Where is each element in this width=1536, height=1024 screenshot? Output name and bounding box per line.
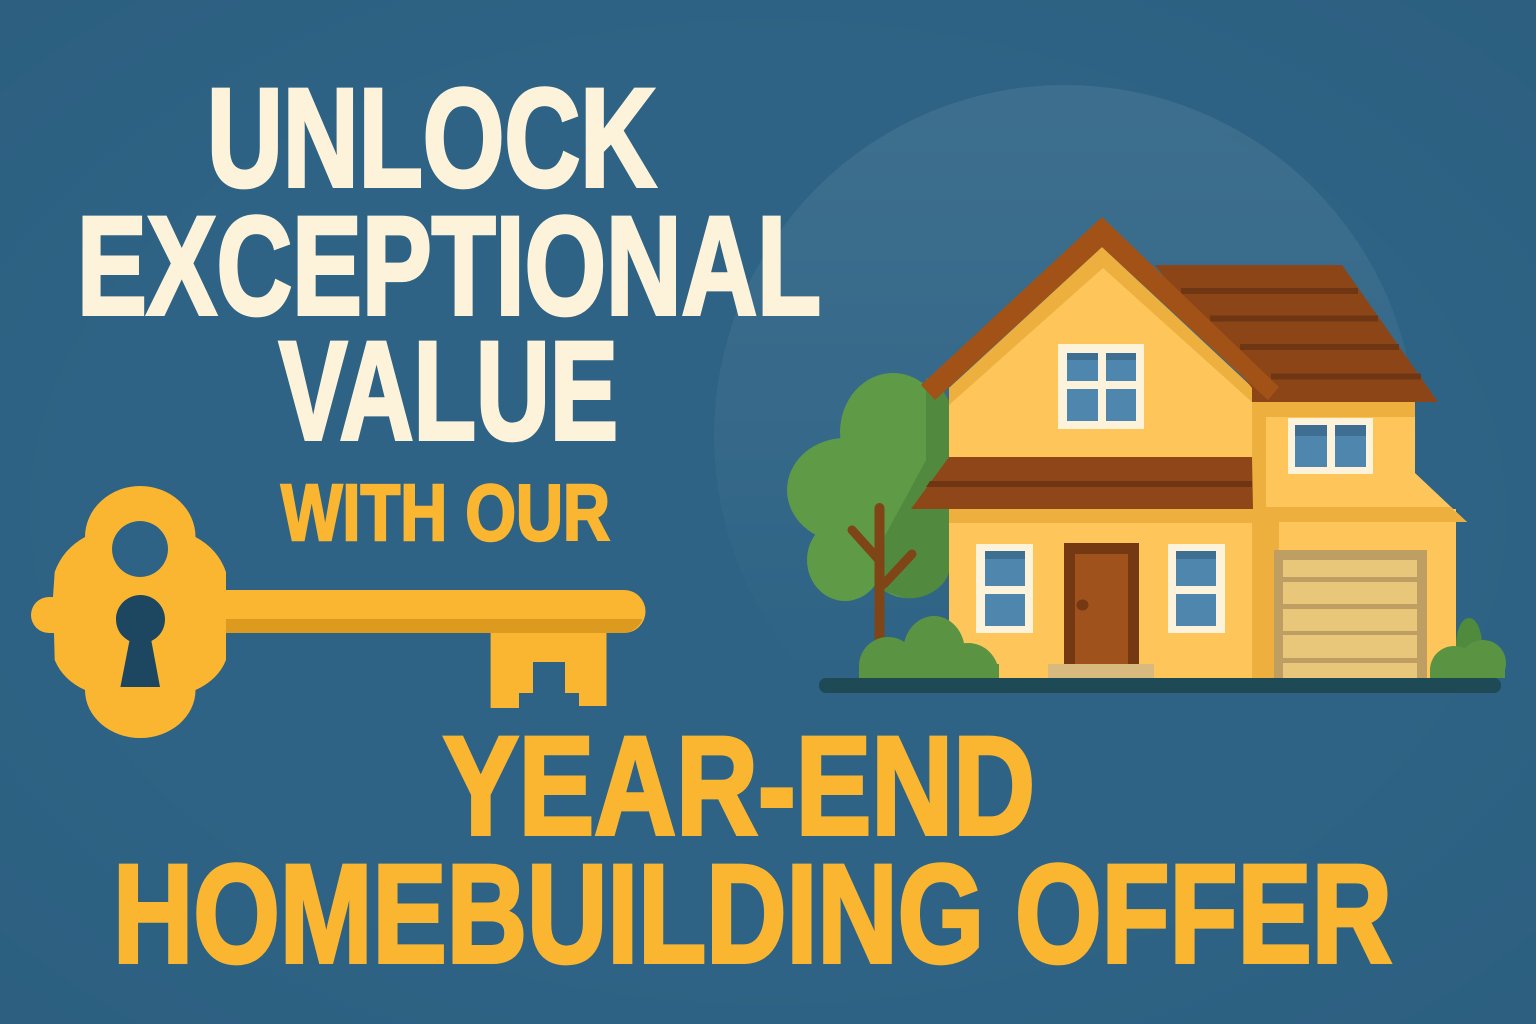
tree foliage (787, 373, 949, 601)
title: unlock exceptional value: VALUE (279, 312, 618, 469)
upper-right window (1288, 418, 1373, 474)
heading: year-end homebuilding offer: YEAR-END (443, 707, 1035, 864)
key bit (491, 630, 606, 708)
door step (1048, 664, 1154, 678)
porch roof (911, 457, 1253, 509)
gable roof (921, 217, 1279, 400)
icon: golden key (31, 486, 646, 738)
upper wall (949, 250, 1252, 460)
key bow (31, 486, 226, 738)
tree trunk (852, 508, 912, 642)
left bush (859, 616, 999, 678)
subheading: with our: WITH OUR (281, 468, 610, 557)
key shaft shadow (226, 619, 642, 633)
tree foliage shadow (880, 378, 949, 598)
upper-right wall (1252, 402, 1467, 522)
front door (1064, 543, 1139, 664)
tree (787, 373, 949, 642)
icon: house scene (787, 217, 1506, 707)
keyhole (116, 595, 165, 687)
lower wall (949, 507, 1467, 678)
background circle behind house (714, 85, 1416, 787)
key shaft (220, 590, 646, 633)
title: unlock exceptional value: EXCEPTIONAL (77, 187, 821, 344)
attic window (1058, 344, 1144, 429)
title: unlock exceptional value (77, 59, 821, 469)
gable inner band (949, 247, 1252, 405)
title: unlock exceptional value: UNLOCK (207, 59, 656, 216)
main roof right side (1155, 265, 1438, 402)
garage door (1274, 550, 1427, 678)
ground line (819, 678, 1501, 693)
left ground-floor window (976, 544, 1033, 633)
right bush (1430, 618, 1506, 678)
heading: year-end homebuilding offer (113, 707, 1392, 992)
right ground-floor window (1168, 544, 1225, 633)
